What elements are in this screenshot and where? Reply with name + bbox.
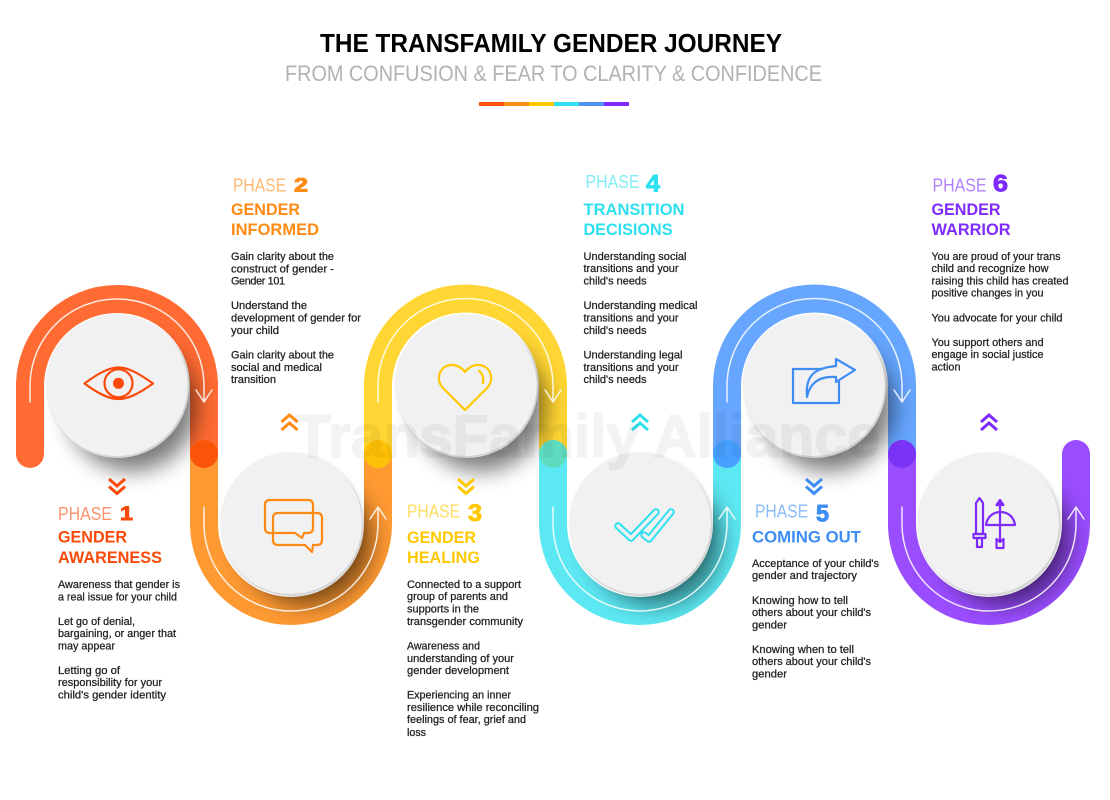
phase 1 label: 1 bbox=[120, 504, 134, 525]
phase 6 label: 6 bbox=[993, 171, 1008, 198]
phase 5 text: others about your child's bbox=[752, 656, 872, 668]
phase 1 text: bargaining, or anger that bbox=[58, 628, 176, 640]
phase 4 text: child's needs bbox=[584, 325, 647, 337]
phase 5 label: PHASE bbox=[755, 502, 808, 522]
chevrons: down, phase 3 bbox=[458, 479, 474, 494]
icon: heart bbox=[439, 365, 491, 410]
phase 5 text: others about your child's bbox=[752, 607, 872, 619]
circle: phase 1 bbox=[46, 314, 189, 458]
phase 1 text: a real issue for your child bbox=[58, 592, 177, 604]
phase 3 label: PHASE bbox=[407, 502, 460, 522]
rainbow divider bar bbox=[479, 102, 629, 106]
phase 6 text: engage in social justice bbox=[932, 349, 1044, 361]
phase 4 text bbox=[584, 251, 698, 386]
panel: phase 5 bbox=[752, 501, 880, 680]
phase 5 text: Knowing when to tell bbox=[752, 644, 854, 656]
phase 6 label bbox=[932, 171, 1008, 198]
phase 3 text: Experiencing an inner bbox=[407, 690, 511, 702]
phase 6 text bbox=[932, 251, 1068, 374]
phase 2 text: Gender 101 bbox=[231, 276, 285, 288]
phase 1 text: may appear bbox=[58, 640, 115, 652]
phase 3 text bbox=[407, 579, 539, 739]
circle: phase 3 bbox=[394, 314, 538, 458]
phase 5 text: Acceptance of your child's bbox=[752, 558, 880, 570]
track junction dots bbox=[190, 440, 916, 468]
phase 1 text: responsibility for your bbox=[58, 677, 162, 689]
icon: speech bubbles bbox=[265, 500, 322, 552]
phase 6 text: You advocate for your child bbox=[932, 312, 1062, 324]
phase 3 text: loss bbox=[407, 727, 427, 739]
phase 6 heading bbox=[932, 201, 1011, 239]
phase 6 text: action bbox=[932, 362, 960, 374]
phase 4 text: transitions and your bbox=[584, 312, 679, 324]
phase 3 text: feelings of fear, grief and bbox=[407, 714, 526, 726]
panel: phase 6 bbox=[932, 171, 1068, 374]
phase 3 text: Awareness and bbox=[407, 640, 480, 652]
phase 4 label: 4 bbox=[646, 171, 661, 198]
phase 2 text: Gain clarity about the bbox=[231, 251, 334, 263]
phase 3 label: 3 bbox=[468, 500, 482, 527]
phase 1 heading: AWARENESS bbox=[58, 549, 162, 567]
chevrons: up, phase 2 bbox=[282, 415, 298, 430]
phase 2 heading: INFORMED bbox=[231, 221, 319, 239]
phase 5 label: 5 bbox=[816, 501, 829, 528]
circle: phase 6 bbox=[917, 452, 1060, 596]
phase 6 text: You support others and bbox=[932, 337, 1044, 349]
phase 2 text: your child bbox=[231, 325, 279, 337]
journey track: phase 5 band bbox=[727, 298, 902, 471]
phase 4 label bbox=[586, 171, 661, 198]
phase 5 heading: COMING OUT bbox=[752, 528, 861, 546]
phase 3 text: transgender community bbox=[407, 616, 524, 628]
phase 4 text: transitions and your bbox=[584, 263, 679, 275]
icon: eye bbox=[84, 368, 153, 399]
phase 2 text: social and medical bbox=[231, 362, 322, 374]
panel: phase 4 bbox=[584, 171, 698, 386]
phase 3 heading bbox=[407, 529, 480, 567]
phase 4 text: child's needs bbox=[584, 374, 647, 386]
circle: phase 2 bbox=[220, 452, 364, 596]
journey track: phase 4 band bbox=[553, 454, 727, 611]
title: THE TRANSFAMILY GENDER JOURNEY bbox=[320, 28, 782, 58]
phase 2 text: construct of gender - bbox=[231, 263, 334, 275]
phase 1 text: child's gender identity bbox=[58, 690, 167, 702]
phase 1 heading: GENDER bbox=[58, 529, 127, 547]
phase 5 text: Knowing how to tell bbox=[752, 595, 848, 607]
journey track: phase 3 band bbox=[378, 298, 553, 471]
journey track: phase 1 band bbox=[30, 299, 204, 471]
phase 6 text: positive changes in you bbox=[932, 288, 1044, 300]
circle: phase 5 bbox=[742, 314, 886, 458]
phase 4 label: PHASE bbox=[586, 172, 640, 192]
phase 5 text: gender bbox=[752, 668, 787, 680]
icon: double check bbox=[618, 512, 671, 539]
phase 4 text: Understanding legal bbox=[584, 350, 682, 362]
chevrons: down, phase 5 bbox=[806, 479, 822, 494]
panel: phase 2 bbox=[231, 176, 361, 386]
phase 4 text: child's needs bbox=[584, 276, 647, 288]
journey track: phase 6 band bbox=[902, 454, 1076, 611]
icon: sword and bow bbox=[974, 498, 1015, 548]
icon: share arrow bbox=[793, 359, 855, 403]
subtitle: FROM CONFUSION & FEAR TO CLARITY & CONFIDENCE bbox=[285, 61, 822, 86]
phase 1 text bbox=[58, 579, 181, 702]
chevrons: up, phase 6 bbox=[981, 415, 997, 430]
phase 2 label: PHASE bbox=[233, 176, 286, 196]
phase 3 text: resilience while reconciling bbox=[407, 702, 539, 714]
phase 2 text: development of gender for bbox=[231, 312, 361, 324]
phase 2 text: Understand the bbox=[231, 300, 307, 312]
phase 3 label bbox=[407, 500, 482, 527]
panel: phase 3 bbox=[407, 500, 539, 739]
phase 5 text: gender bbox=[752, 620, 787, 632]
phase 3 text: gender development bbox=[407, 665, 509, 677]
phase 1 text: Awareness that gender is bbox=[58, 579, 181, 591]
phase 1 text: Letting go of bbox=[58, 665, 121, 677]
phase 2 heading: GENDER bbox=[231, 201, 300, 219]
phase 5 text: gender and trajectory bbox=[752, 570, 858, 582]
phase 6 heading: GENDER bbox=[932, 201, 1001, 219]
phase 3 text: Connected to a support bbox=[407, 579, 521, 591]
panel: phase 1 bbox=[58, 504, 181, 702]
phase 4 text: Understanding social bbox=[584, 251, 686, 263]
phase 6 label: PHASE bbox=[932, 176, 986, 196]
phase 6 text: You are proud of your trans bbox=[932, 251, 1061, 263]
phase 2 text bbox=[231, 251, 361, 386]
phase 4 text: Understanding medical bbox=[584, 300, 698, 312]
white direction arrows along track bbox=[30, 298, 1084, 611]
phase 5 label bbox=[755, 501, 829, 528]
circle: phase 4 bbox=[569, 452, 712, 596]
phase 4 heading bbox=[584, 201, 684, 239]
phase 2 heading bbox=[231, 201, 319, 239]
watermark: TransFamily Alliance bbox=[295, 403, 880, 470]
phase 4 heading: TRANSITION bbox=[584, 201, 684, 219]
phase 2 text: transition bbox=[231, 374, 276, 386]
phase 1 heading bbox=[58, 529, 162, 567]
phase 6 text: raising this child has created bbox=[932, 276, 1068, 288]
phase 6 text: child and recognize how bbox=[932, 263, 1049, 275]
phase 2 label: 2 bbox=[294, 176, 308, 197]
phase 1 text: Let go of denial, bbox=[58, 616, 135, 628]
phase 2 text: Gain clarity about the bbox=[231, 350, 334, 362]
phase 5 text bbox=[752, 558, 880, 680]
journey track: phase 2 band bbox=[204, 454, 378, 611]
phase 3 heading: HEALING bbox=[407, 549, 480, 567]
chevrons: up, phase 4 bbox=[632, 415, 648, 430]
phase 4 text: transitions and your bbox=[584, 362, 679, 374]
phase 3 heading: GENDER bbox=[407, 529, 476, 547]
phase 6 heading: WARRIOR bbox=[932, 221, 1011, 239]
phase 4 heading: DECISIONS bbox=[584, 221, 672, 239]
phase 3 text: understanding of your bbox=[407, 653, 514, 665]
phase 1 label: PHASE bbox=[58, 504, 112, 524]
phase 3 text: group of parents and bbox=[407, 591, 508, 603]
chevrons: down, phase 1 bbox=[109, 479, 125, 494]
phase 3 text: supports in the bbox=[407, 604, 479, 616]
